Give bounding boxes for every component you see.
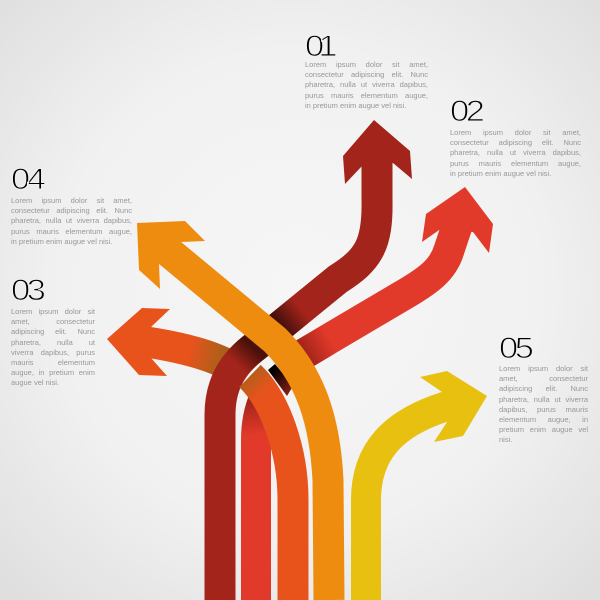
text 05: amet, consectetur xyxy=(499,374,588,383)
shadow: dark overlap xyxy=(268,364,293,396)
text 05: Lorem ipsum dolor sit xyxy=(499,364,588,373)
step 05 xyxy=(499,332,588,444)
text 02: consectetur adipiscing elit. Nunc xyxy=(450,138,581,147)
text 04: in pretium enim augue vel nisi. xyxy=(11,237,112,246)
text 04: purus mauris elementum augue, xyxy=(11,227,132,236)
text 05: adipiscing elit. Nunc xyxy=(499,384,588,393)
text 01: pharetra, nulla ut viverra dapibus, xyxy=(305,80,428,89)
text 03 xyxy=(11,307,95,387)
text 01: in pretium enim augue vel nisi. xyxy=(305,101,406,110)
text 02: pharetra, nulla ut viverra dapibus, xyxy=(450,148,581,157)
arrow 3: orange-red, near section xyxy=(250,376,293,600)
text 05: dapibus, purus mauris xyxy=(499,405,588,414)
text 03: amet, consectetur xyxy=(11,317,95,326)
arrow 5: yellow xyxy=(366,371,487,600)
text 04: Lorem ipsum dolor sit amet, xyxy=(11,196,132,205)
text 02 xyxy=(450,128,581,178)
text 02: in pretium enim augue vel nisi. xyxy=(450,169,551,178)
text 02: Lorem ipsum dolor sit amet, xyxy=(450,128,581,137)
text 01 xyxy=(305,60,428,110)
text 01: Lorem ipsum dolor sit amet, xyxy=(305,60,428,69)
number 01: 01 xyxy=(305,30,332,63)
number 05: 05 xyxy=(499,332,530,365)
number 03: 03 xyxy=(11,274,42,307)
text 02: purus mauris elementum augue, xyxy=(450,159,581,168)
step 02 xyxy=(450,95,581,178)
arrow 4: orange xyxy=(137,221,329,600)
text 05: elementum augue, in xyxy=(499,415,588,424)
text 05: pharetra, nulla ut viverra xyxy=(499,395,588,404)
text 05 xyxy=(499,364,588,444)
number 02: 02 xyxy=(450,95,481,128)
text 04: pharetra, nulla ut viverra dapibus, xyxy=(11,216,132,225)
arrow 1: dark red xyxy=(220,120,412,600)
step 03 xyxy=(11,274,95,387)
text 01: consectetur adipiscing elit. Nunc xyxy=(305,70,428,79)
step 04 xyxy=(11,163,132,246)
arrow 2: red xyxy=(256,187,493,600)
text 04: consectetur adipiscing elit. Nunc xyxy=(11,206,132,215)
text 01: purus mauris elementum augue, xyxy=(305,91,428,100)
text 05: pretium enim augue vel xyxy=(499,425,588,434)
arrow 3: orange-red, far section xyxy=(107,308,240,376)
text 05: nisi. xyxy=(499,435,512,444)
text 03: augue, in pretium enim xyxy=(11,368,95,377)
text 03: adipiscing elit. Nunc xyxy=(11,327,95,336)
text 03: mauris elementum xyxy=(11,358,95,367)
text 03: Lorem ipsum dolor sit xyxy=(11,307,95,316)
number 04: 04 xyxy=(11,163,42,196)
text 04 xyxy=(11,196,132,246)
text 03: pharetra, nulla ut xyxy=(11,338,95,347)
step 01 xyxy=(305,30,428,110)
text 03: augue vel nisi. xyxy=(11,378,59,387)
text 03: viverra dapibus, purus xyxy=(11,348,95,357)
